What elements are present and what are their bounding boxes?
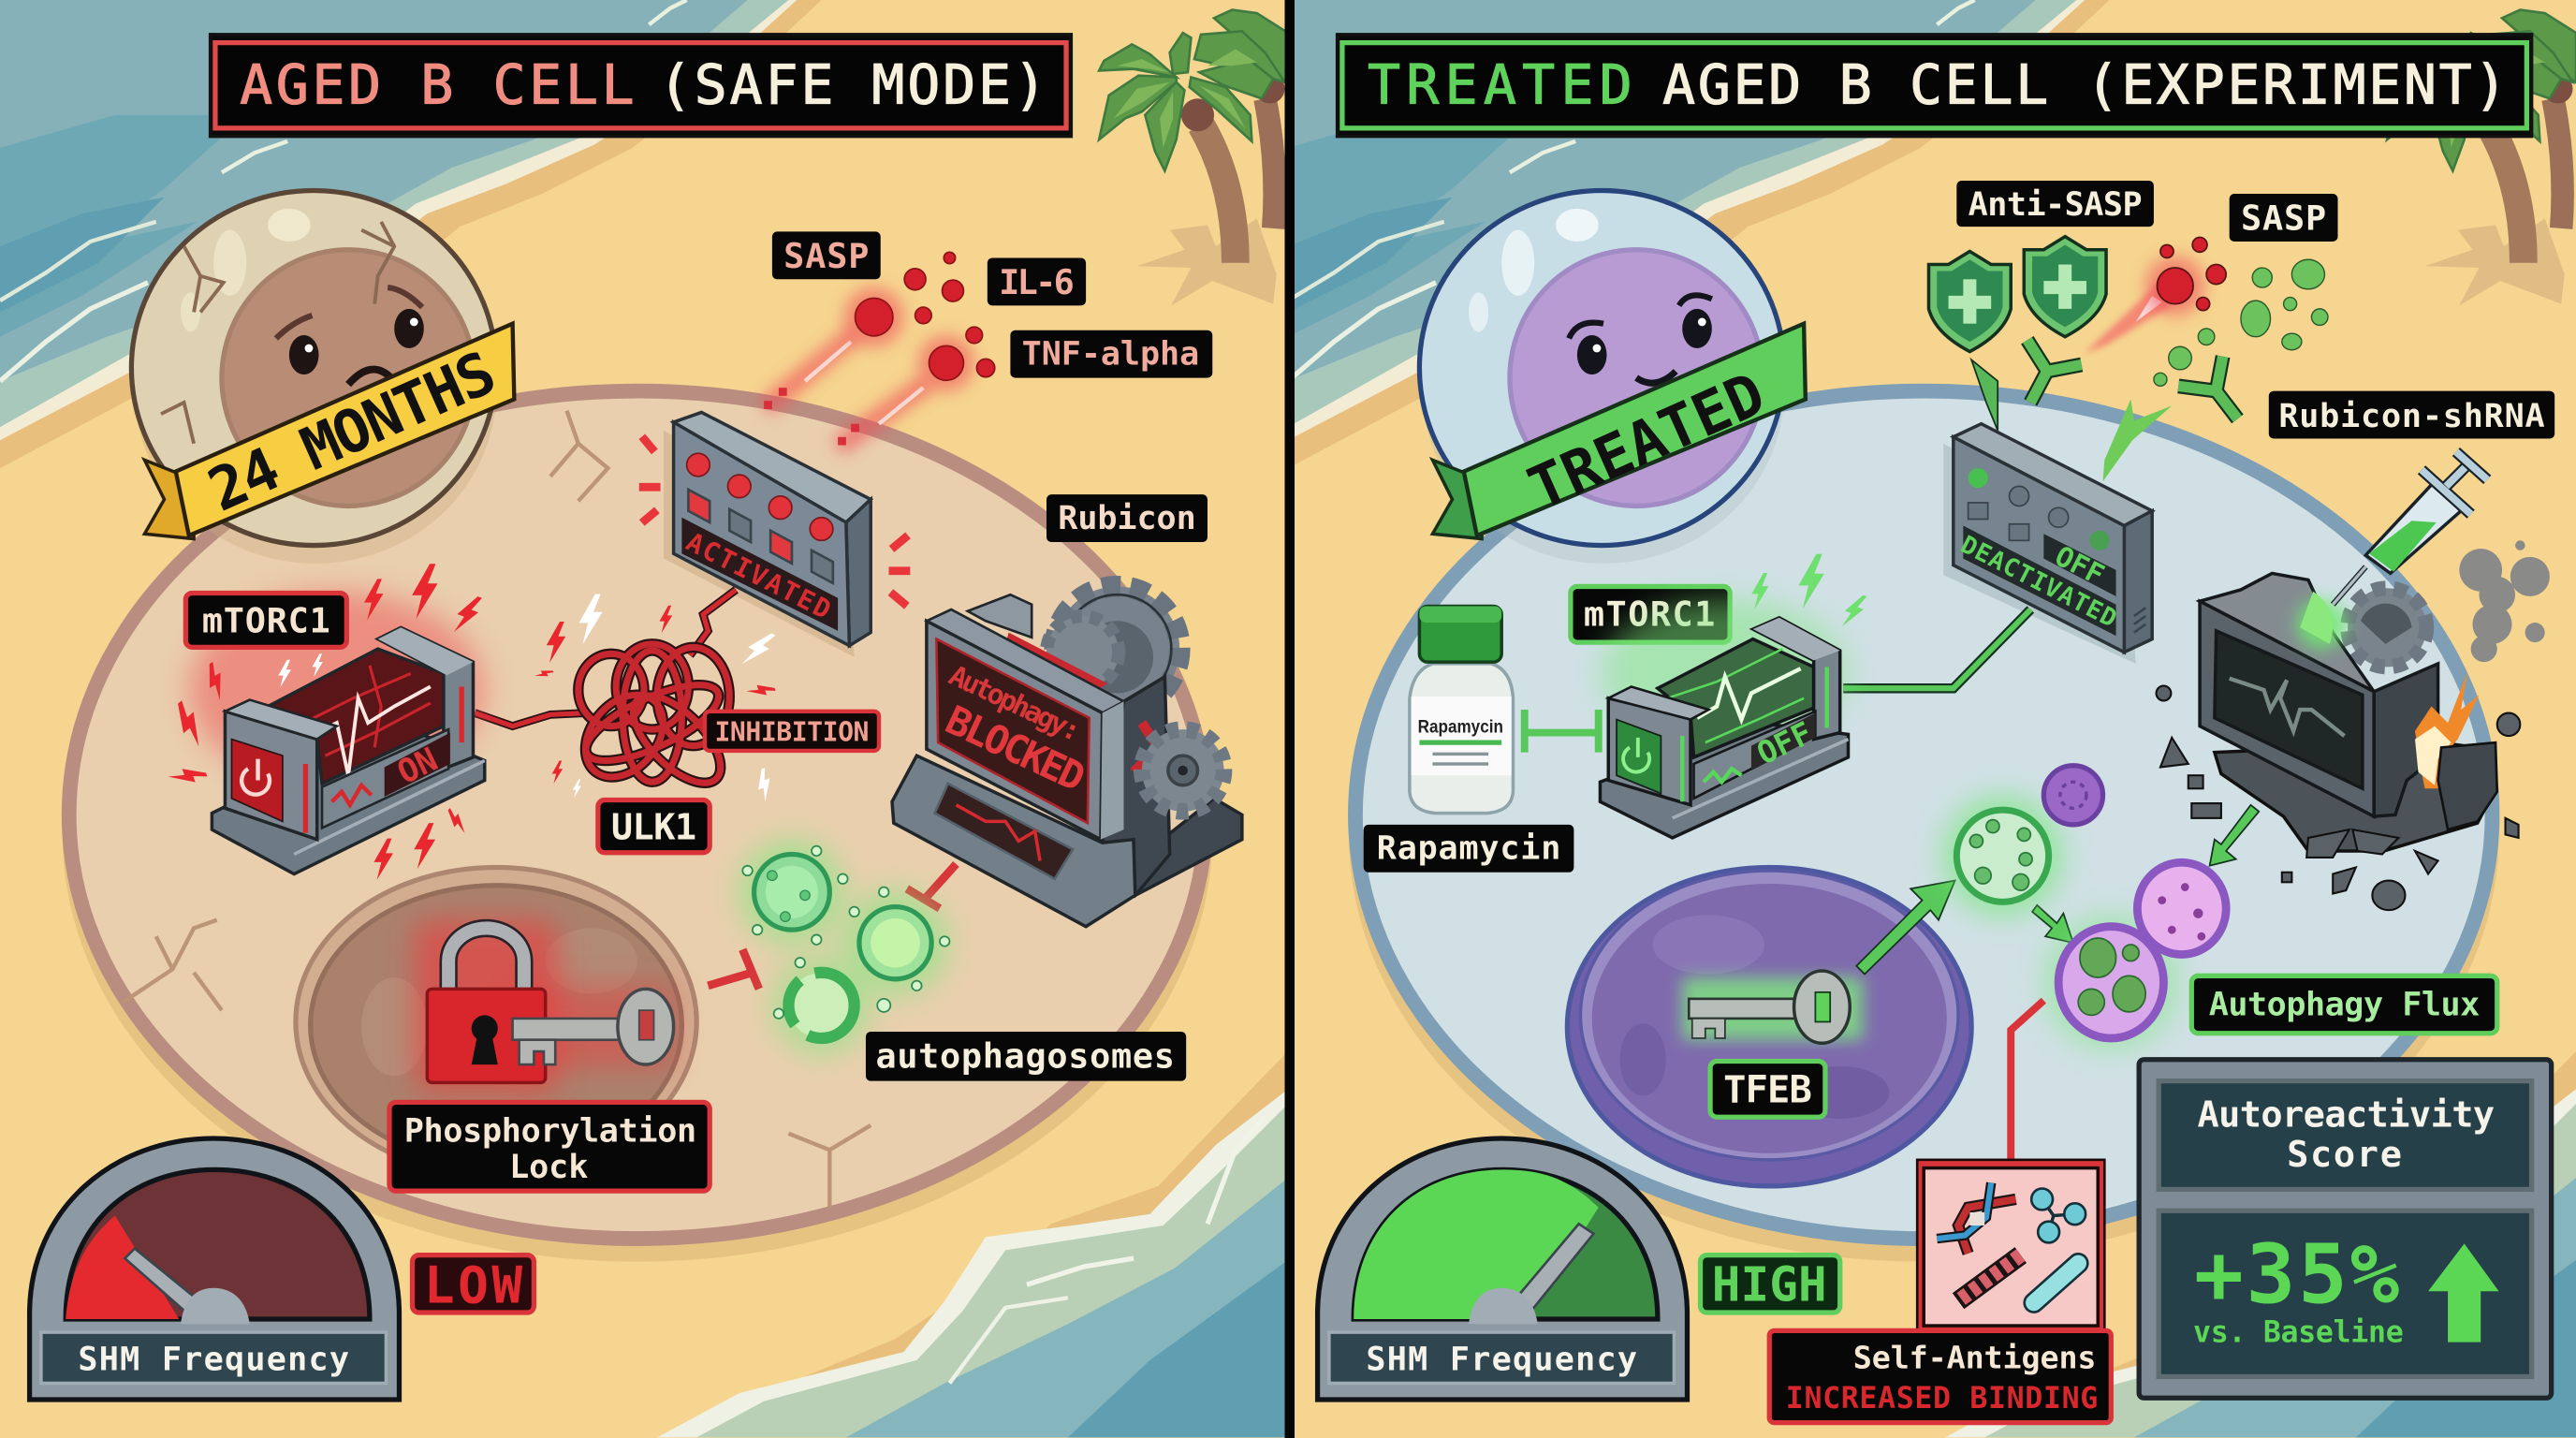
- icon: shields: [1928, 237, 2106, 352]
- cell body: treated: [1349, 391, 2499, 1262]
- icon: smoke: [2459, 540, 2550, 662]
- title: aged B cell: [211, 35, 1071, 137]
- sparks around ULK1: [534, 594, 777, 802]
- panel: autoreactivity score: +35%: [2194, 1227, 2399, 1322]
- SASP cytokine burst: red particles and trails: [764, 252, 995, 447]
- machine: mTORC1 on: ON: [391, 741, 444, 792]
- label: INHIBITION: [705, 712, 879, 751]
- machine: Rubicon autophagy blocked: Autophagy:: [944, 659, 1086, 749]
- panel: self-antigens: [1769, 1160, 2111, 1423]
- label: Rubicon-shRNA: Rubicon-shRNA: [2278, 397, 2545, 435]
- control panel: deactivated: DEACTIVATED: [1956, 531, 2121, 634]
- icon: rapamycin bottle: [1410, 606, 1513, 814]
- icon: purple lysosome: [2043, 766, 2103, 825]
- cell nucleus bubble: sad aged cell: [131, 191, 496, 564]
- ULK1 tangled knot: [569, 644, 735, 798]
- label: SASP: SASP: [783, 236, 869, 276]
- panel: self-antigens: Self-Antigens: [1853, 1340, 2097, 1376]
- label: HIGH: HIGH: [1712, 1258, 1827, 1313]
- icon: antigen molecules: [1937, 1182, 2086, 1302]
- ribbon: 24 months: 24 MONTHS: [198, 337, 505, 525]
- gauge: SHM frequency low: [30, 1138, 399, 1400]
- icon: green leaf arrows: [1971, 360, 2172, 481]
- inhibition arrows to autophagosomes: [708, 864, 956, 989]
- bubble: happy treated cell: [1419, 191, 1784, 564]
- ribbon: treated: TREATED: [1518, 359, 1775, 523]
- label: mTORC1: mTORC1: [1584, 594, 1715, 635]
- label: phosphorylation lock: [389, 1102, 710, 1191]
- pit: TFEB purple: [1567, 867, 1971, 1186]
- icon: up arrow: [2428, 1243, 2499, 1343]
- cell body: aged: [63, 391, 1212, 1262]
- label: Autophagy Flux: [2191, 976, 2497, 1034]
- machine: mTORC1 off: [1600, 599, 1848, 838]
- title: treated aged B cell: AGED B CELL (EXPERIMENT): [1662, 53, 2507, 117]
- autolysosome fusion: [2045, 862, 2226, 1049]
- panel: autoreactivity score: Score: [2287, 1134, 2402, 1176]
- machine: mTORC1 on: [189, 592, 485, 874]
- ribbon: treated: [1432, 324, 1806, 539]
- label: Rapamycin: Rapamycin: [1377, 829, 1560, 868]
- gauge: SHM frequency low: SHM Frequency: [78, 1340, 349, 1378]
- label: INHIBITION: INHIBITION: [714, 716, 869, 747]
- divider: [1284, 0, 1295, 1438]
- machine: broken Rubicon: [2157, 573, 2520, 910]
- title: aged B cell: AGED B CELL: [240, 53, 634, 117]
- label: TNF-alpha: TNF-alpha: [1022, 335, 1199, 374]
- label: ULK1: [598, 800, 710, 853]
- label: mTORC1: [1571, 586, 1730, 642]
- beach background left: [0, 0, 1288, 1438]
- icon: rapamycin bottle: Rapamycin: [1418, 718, 1503, 738]
- gauge: SHM frequency high: SHM Frequency: [1366, 1340, 1637, 1378]
- machine: Rubicon autophagy blocked: [892, 586, 1242, 927]
- label: phosphorylation lock: Lock: [509, 1148, 588, 1186]
- sparks around mTORC1: [167, 564, 483, 880]
- connector: self-antigens: [2011, 1001, 2043, 1160]
- machine: mTORC1 off: OFF: [1751, 714, 1818, 772]
- beach background right: [1288, 0, 2576, 1438]
- label: Anti-SASP: Anti-SASP: [1969, 185, 2143, 224]
- control panel: deactivated: [1943, 424, 2152, 664]
- label: ULK1: ULK1: [611, 807, 696, 849]
- sparks around mTORC1 treated: [1751, 554, 1868, 632]
- panel: treated aged B cell (experiment): [1288, 0, 2576, 1438]
- label: IL-6: [988, 257, 1086, 305]
- gauge: SHM frequency high: [1318, 1138, 1687, 1400]
- panel: autoreactivity score: Autoreactivity: [2197, 1094, 2495, 1137]
- machine: Rubicon autophagy blocked: BLOCKED: [939, 697, 1092, 800]
- panel: aged B cell (safe mode): [0, 0, 1288, 1438]
- pit: phosphorylation lock: [296, 867, 696, 1176]
- title: treated aged B cell: TREATED: [1368, 53, 1632, 117]
- control panel: activated: ACTIVATED: [681, 526, 836, 625]
- label: phosphorylation lock: Phosphorylation: [404, 1112, 696, 1151]
- label: Autophagy Flux: Autophagy Flux: [2209, 985, 2480, 1023]
- icon: TFEB key: [1682, 971, 1863, 1043]
- panel: autoreactivity score: [2139, 1060, 2552, 1398]
- title: aged B cell: (SAFE MODE): [659, 53, 1046, 117]
- icon: syringe: [2333, 452, 2487, 605]
- autophagosomes: [739, 840, 949, 1055]
- panel: autoreactivity score: vs. Baseline: [2193, 1316, 2404, 1350]
- label: mTORC1: [185, 593, 346, 647]
- icon: neutralized SASP particles: [2085, 238, 2328, 386]
- label: autophagosomes: autophagosomes: [875, 1036, 1175, 1077]
- label: SASP: [772, 231, 881, 279]
- panel: self-antigens: INCREASED BINDING: [1786, 1382, 2098, 1416]
- label: Rubicon: [1046, 494, 1208, 542]
- control panel: activated: [638, 412, 911, 657]
- label: SASP: SASP: [2241, 198, 2326, 239]
- inhibition bar: rapamycin to mTORC1: [1525, 710, 1599, 753]
- icon: antibodies: [2027, 340, 2237, 418]
- label: LOW: LOW: [424, 1256, 522, 1314]
- label: TFEB: TFEB: [1723, 1067, 1812, 1111]
- label: mTORC1: mTORC1: [202, 601, 330, 641]
- title: treated aged B cell: [1338, 35, 2532, 137]
- autophagosome vesicle: [1943, 797, 2062, 915]
- arrows: autophagy flow: [1856, 805, 2259, 975]
- label: Rubicon: Rubicon: [1058, 499, 1196, 537]
- control panel: deactivated: OFF: [2050, 540, 2109, 592]
- wires to ULK1 tangle and mTORC1: [475, 590, 736, 726]
- label: SASP: [2230, 194, 2338, 242]
- label: TFEB: [1710, 1062, 1825, 1117]
- label: IL-6: IL-6: [999, 262, 1075, 302]
- wire: mTORC1 to panel: [1843, 609, 2030, 688]
- icon: padlock and key: [414, 920, 674, 1093]
